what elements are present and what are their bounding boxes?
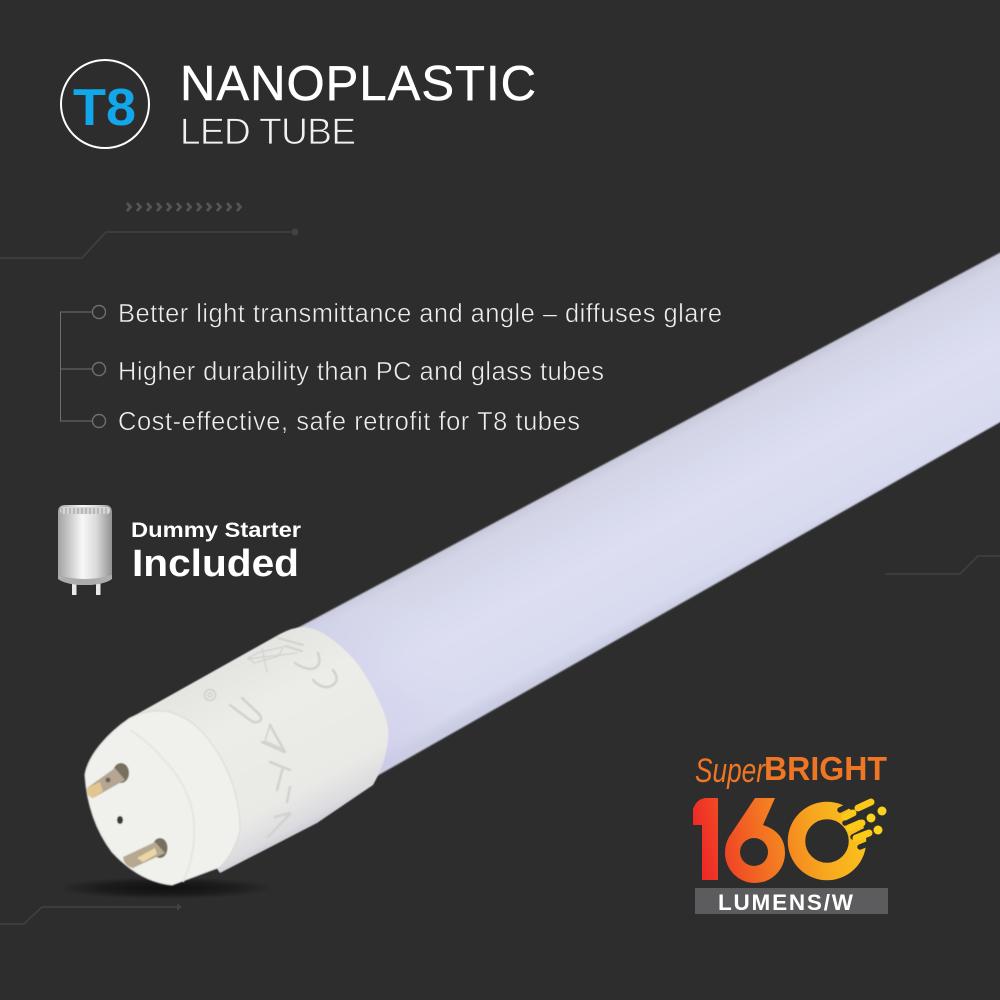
feature list: Cost-effective, safe retrofit for T8 tubes	[118, 408, 580, 436]
background circuit lines	[0, 228, 1000, 924]
feature list: Higher durability than PC and glass tubes	[118, 358, 604, 386]
title: LED TUBE	[180, 111, 356, 152]
cap end face edge	[130, 730, 194, 882]
tube shadow	[57, 877, 273, 899]
callout: dummy starter included	[131, 518, 302, 585]
feature list	[60, 300, 722, 436]
lumens/W label	[695, 888, 888, 915]
end cap	[85, 627, 388, 885]
logo bold word: BRIGHT	[764, 750, 887, 787]
lumens/W label: LUMENS/W	[718, 890, 854, 915]
badge: T8: T8	[73, 79, 136, 137]
feature list: Better light transmittance and angle – diffuses glare	[118, 300, 722, 328]
number 160	[693, 795, 886, 883]
badge: T8	[61, 60, 149, 148]
title: NANOPLASTIC	[180, 57, 536, 111]
title	[180, 57, 536, 152]
cap embossed markings	[204, 638, 337, 837]
pin: lower	[123, 838, 168, 868]
callout: dummy starter included: Dummy Starter	[131, 518, 302, 542]
callout: dummy starter included: Included	[132, 543, 299, 585]
cap collar and front	[85, 711, 240, 885]
logo: SuperBRIGHT 160 lumens/W	[693, 750, 888, 915]
logo script word: Super	[695, 752, 766, 790]
icon: dummy starter	[58, 505, 112, 595]
pin: upper	[87, 763, 129, 798]
tube body	[290, 242, 1000, 780]
screw hole	[117, 816, 123, 824]
LED tube	[85, 242, 1000, 885]
chevron row decoration	[127, 203, 240, 211]
